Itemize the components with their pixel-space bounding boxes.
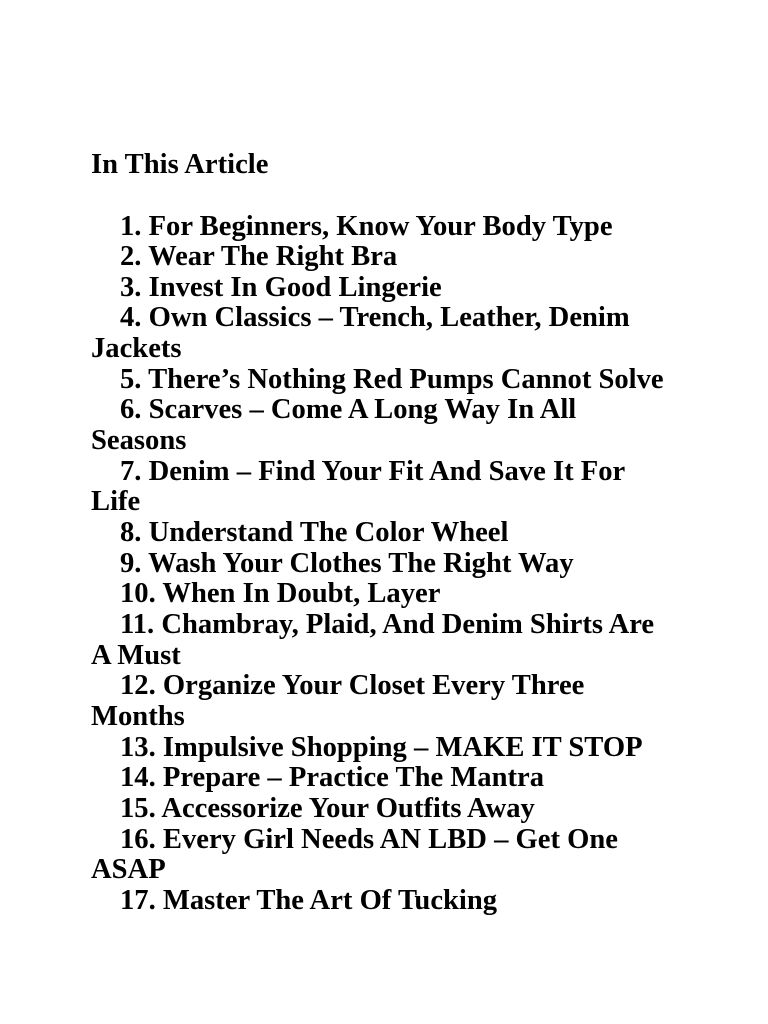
article list: 4. Own Classics – Trench, Leather, Denim xyxy=(120,302,630,333)
article list: 11. Chambray, Plaid, And Denim Shirts Are xyxy=(120,609,654,640)
article list: Jackets xyxy=(91,333,182,364)
article list: 16. Every Girl Needs AN LBD – Get One xyxy=(120,824,618,854)
title: In This Article xyxy=(91,149,268,180)
article list: 7. Denim – Find Your Fit And Save It For xyxy=(120,456,625,486)
article list: 5. There’s Nothing Red Pumps Cannot Solve xyxy=(120,364,664,394)
article list: 15. Accessorize Your Outfits Away xyxy=(120,793,535,824)
article list: 14. Prepare – Practice The Mantra xyxy=(120,762,544,793)
article list: 3. Invest In Good Lingerie xyxy=(120,272,442,302)
article list: 13. Impulsive Shopping – MAKE IT STOP xyxy=(120,732,643,762)
article list: 9. Wash Your Clothes The Right Way xyxy=(120,548,574,578)
article list: 10. When In Doubt, Layer xyxy=(120,578,440,609)
article list: 6. Scarves – Come A Long Way In All xyxy=(120,394,576,425)
article list: 2. Wear The Right Bra xyxy=(120,241,397,272)
article list: 12. Organize Your Closet Every Three xyxy=(120,670,584,701)
article list: 8. Understand The Color Wheel xyxy=(120,517,508,548)
article list: Seasons xyxy=(91,425,186,456)
article list: Months xyxy=(91,701,185,732)
article list: 17. Master The Art Of Tucking xyxy=(120,885,497,916)
article list: 1. For Beginners, Know Your Body Type xyxy=(120,210,613,242)
article list: ASAP xyxy=(91,854,166,885)
article list: A Must xyxy=(91,640,181,670)
article list xyxy=(91,210,664,916)
article list: Life xyxy=(91,486,140,517)
